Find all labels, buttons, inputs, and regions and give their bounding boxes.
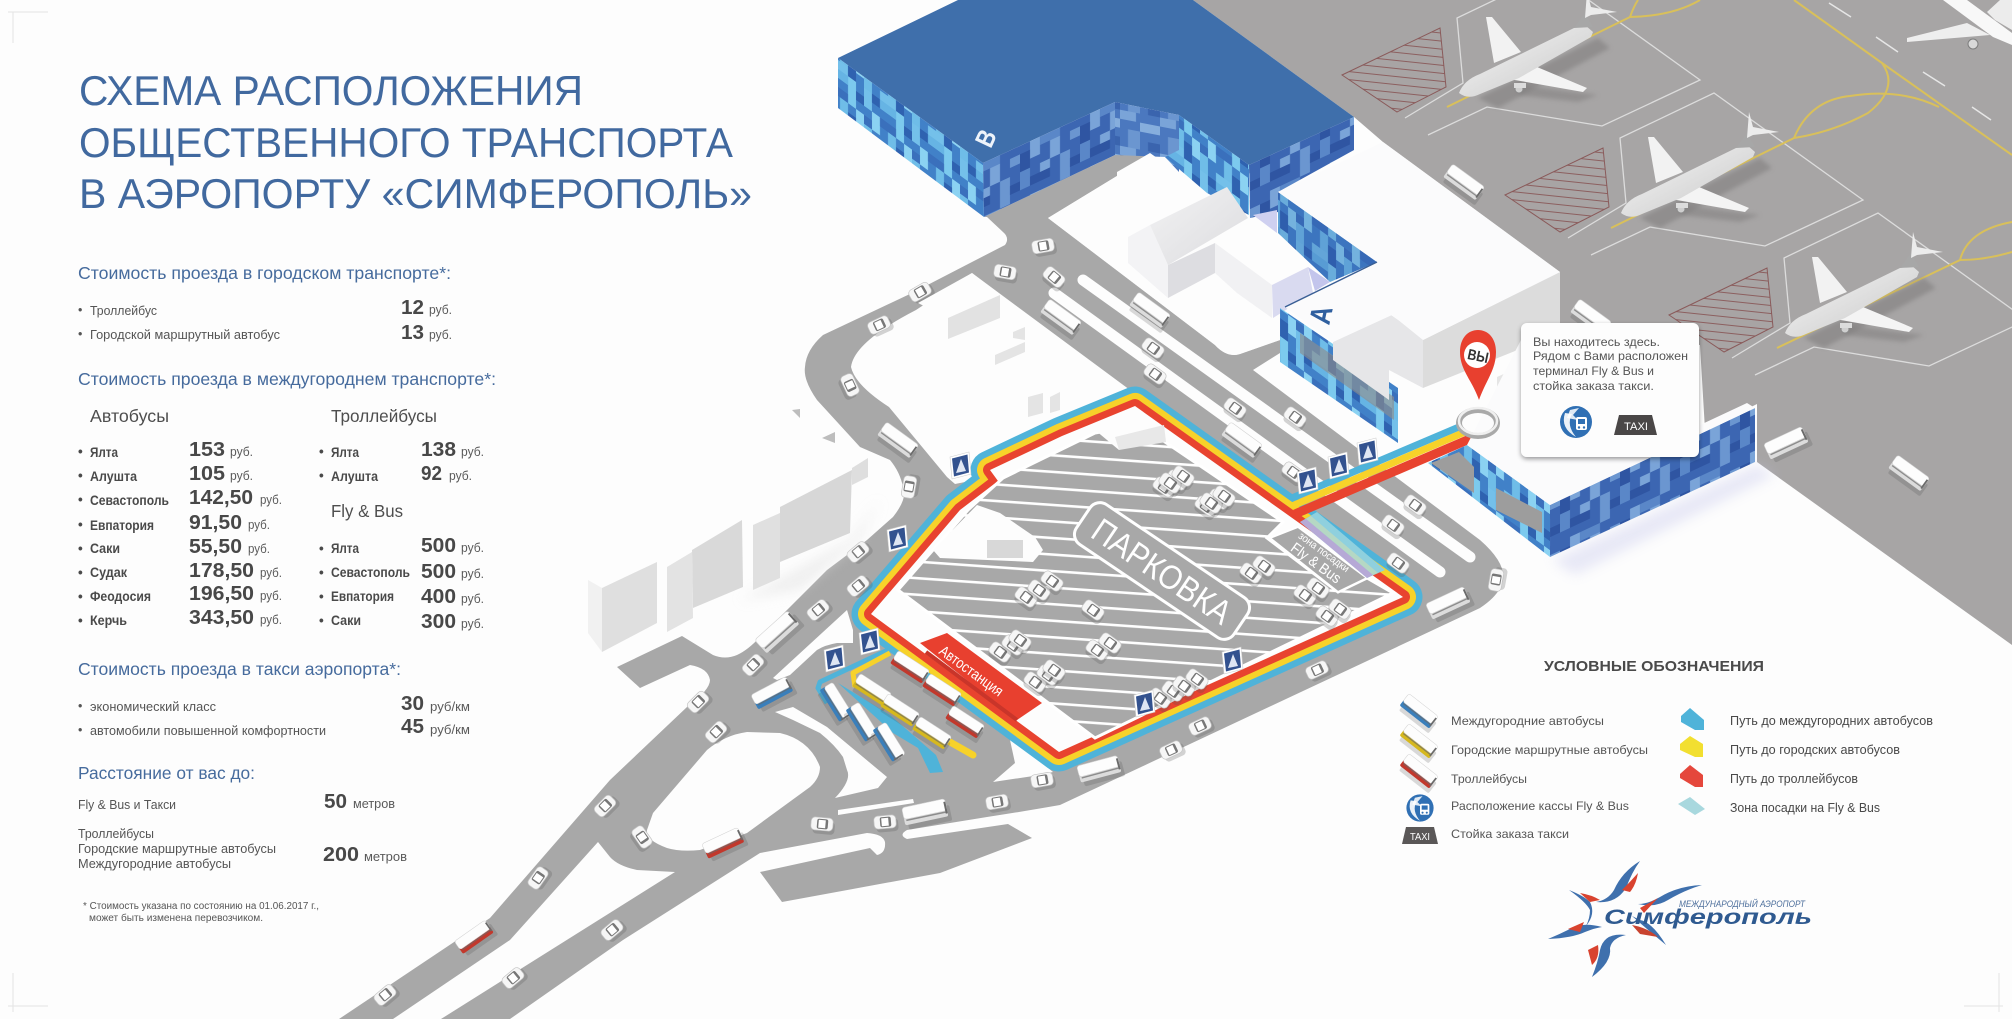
title bbox=[79, 67, 752, 217]
taxi prices: • bbox=[78, 723, 82, 737]
taxi prices: руб/км bbox=[430, 700, 470, 714]
fly and bus fares: • bbox=[319, 589, 324, 604]
intercity transport prices bbox=[78, 369, 496, 633]
logo bbox=[1548, 861, 1812, 977]
fly and bus fares: Севастополь bbox=[331, 565, 410, 580]
bus fares: Судак bbox=[90, 565, 127, 580]
distances: 200 bbox=[323, 844, 359, 866]
taxi prices: 30 bbox=[401, 693, 424, 715]
legend: УСЛОВНЫЕ ОБОЗНАЧЕНИЯ bbox=[1544, 658, 1764, 675]
title: СХЕМА РАСПОЛОЖЕНИЯ bbox=[79, 67, 583, 114]
bus fares bbox=[78, 439, 282, 629]
house in front of terminal bbox=[1117, 153, 1313, 318]
legend bbox=[1397, 658, 1933, 844]
legend: fly and bus boarding zone bbox=[1678, 797, 1880, 815]
airplanes bbox=[1459, 0, 2012, 348]
taxi prices: 45 bbox=[401, 716, 424, 738]
trolleybus fares: • bbox=[319, 468, 324, 483]
fly and bus fares: руб. bbox=[461, 541, 484, 555]
fly and bus fares: Евпатория bbox=[331, 589, 394, 604]
legend: route to city buses bbox=[1680, 736, 1900, 757]
fly and bus fares bbox=[319, 501, 484, 633]
building B bbox=[838, 0, 1354, 218]
apron with parking stands bbox=[1193, 0, 2012, 645]
distances bbox=[78, 763, 407, 871]
legend: trolleybus: Троллейбусы bbox=[1451, 772, 1527, 786]
bus fares: Алушта bbox=[90, 469, 137, 484]
boulevard medians bbox=[1054, 280, 1470, 572]
legend: intercity bus bbox=[1397, 693, 1604, 733]
trolleybus fares: 92 bbox=[421, 463, 442, 485]
legend: fly and bus boarding zone: Зона посадки на Fly & Bus bbox=[1730, 801, 1880, 815]
bus fares: руб. bbox=[260, 566, 282, 580]
bus fares: 178,50 bbox=[189, 560, 254, 582]
city transport prices: 12 bbox=[401, 297, 424, 319]
you are here pin bbox=[1460, 330, 1496, 400]
building B: В bbox=[970, 125, 1003, 152]
bus fares: • bbox=[78, 565, 83, 580]
callout: Рядом с Вами расположен bbox=[1533, 349, 1688, 363]
legend: route to intercity buses: Путь до междугородних автобусов bbox=[1730, 714, 1933, 728]
bus fares: Ялта bbox=[90, 445, 118, 460]
legend: fly and bus ticket office: Расположение кассы Fly & Bus bbox=[1451, 799, 1629, 813]
legend: route to city buses: Путь до городских автобусов bbox=[1730, 743, 1900, 757]
city transport prices: руб. bbox=[429, 328, 452, 342]
parked cars bbox=[985, 464, 1354, 714]
terminal A: А bbox=[1302, 302, 1339, 327]
trolleybus fares: руб. bbox=[461, 445, 484, 459]
bus fares: • bbox=[78, 444, 83, 459]
parking lot bbox=[898, 417, 1393, 738]
trolleybus fares bbox=[319, 439, 484, 485]
callout: Вы находитесь здесь. bbox=[1533, 335, 1660, 349]
bus fares: Феодосия bbox=[90, 589, 151, 604]
distances: 50 bbox=[324, 791, 347, 813]
intercity transport prices: Автобусы bbox=[90, 406, 169, 426]
bus fares: 105 bbox=[189, 463, 225, 485]
roof of terminal A bbox=[1278, 142, 1560, 342]
fly and bus boarding zone: Fly & Bus bbox=[1287, 540, 1344, 587]
distances: Междугородние автобусы bbox=[78, 857, 231, 871]
legend: city bus bbox=[1397, 723, 1648, 763]
bus fares: руб. bbox=[248, 518, 270, 532]
left apartment blocks bbox=[588, 409, 880, 652]
plane top right bbox=[1907, 0, 2012, 49]
bus station building: Автостанция bbox=[936, 642, 1006, 700]
bus fares: • bbox=[78, 468, 83, 483]
fly and bus fares: 400 bbox=[421, 586, 456, 608]
legend: route to intercity buses bbox=[1681, 708, 1933, 730]
bus fares: Саки bbox=[90, 541, 120, 556]
distances: Расстояние от вас до: bbox=[78, 763, 255, 783]
trolleybus fares: Ялта bbox=[331, 445, 359, 460]
logo: МЕЖДУНАРОДНЫЙ АЭРОПОРТ bbox=[1679, 898, 1806, 910]
terminal lower block bbox=[1428, 340, 1775, 575]
bus fares: 55,50 bbox=[189, 536, 242, 558]
bus fares: • bbox=[78, 517, 83, 532]
logo: Симферополь bbox=[1604, 906, 1812, 929]
trolleybus fares: Алушта bbox=[331, 469, 378, 484]
legend: route to trolleybuses: Путь до троллейбусов bbox=[1730, 772, 1858, 786]
legend: taxi desk bbox=[1402, 827, 1569, 844]
roof of terminal B bbox=[838, 0, 1354, 165]
bus fares: руб. bbox=[260, 613, 282, 627]
bus fares: 196,50 bbox=[189, 583, 254, 605]
bus fares: 153 bbox=[189, 439, 225, 461]
pedestrian route bands around parking bbox=[871, 406, 1403, 752]
footnote bbox=[83, 901, 319, 924]
bus fares: Севастополь bbox=[90, 493, 169, 508]
bus fares: Евпатория bbox=[90, 518, 154, 533]
city transport prices: 13 bbox=[401, 322, 424, 344]
fly and bus fares: • bbox=[319, 541, 324, 556]
legend: taxi desk: TAXI bbox=[1410, 832, 1430, 843]
fly and bus fares: 500 bbox=[421, 561, 456, 583]
city transport prices: Троллейбус bbox=[90, 304, 157, 318]
fly and bus fares: 500 bbox=[421, 535, 456, 557]
taxi prices: руб/км bbox=[430, 723, 470, 737]
parking label: ПАРКОВКА bbox=[1084, 511, 1239, 632]
legend: taxi desk: Стойка заказа такси bbox=[1451, 827, 1569, 841]
bus fares: • bbox=[78, 589, 83, 604]
callout: терминал Fly & Bus и bbox=[1533, 364, 1654, 378]
city transport prices: Стоимость проезда в городском транспорте*: bbox=[78, 263, 451, 283]
fly and bus fares: 300 bbox=[421, 611, 456, 633]
city transport prices: • bbox=[78, 327, 82, 341]
bus fares: руб. bbox=[248, 542, 270, 556]
road vehicles bbox=[372, 164, 1932, 1010]
you are here pin: ВЫ bbox=[1466, 346, 1490, 367]
fly and bus boarding zone: зона посадки bbox=[1296, 530, 1352, 575]
bus fares: 91,50 bbox=[189, 512, 242, 534]
footnote: может быть изменена перевозчиком. bbox=[89, 912, 263, 924]
city transport prices: руб. bbox=[429, 303, 452, 317]
legend: intercity bus: Междугородние автобусы bbox=[1451, 714, 1604, 728]
building on parking corner bbox=[933, 417, 1166, 562]
distances: метров bbox=[364, 850, 407, 864]
legend: route to trolleybuses bbox=[1680, 765, 1858, 787]
bus station building bbox=[920, 633, 1042, 720]
taxi prices: автомобили повышенной комфортности bbox=[90, 724, 326, 738]
city transport prices bbox=[78, 263, 452, 344]
fly and bus fares: Саки bbox=[331, 613, 361, 628]
white ground islands bbox=[647, 154, 1309, 851]
star emblem bbox=[1548, 861, 1702, 977]
callout bbox=[1521, 323, 1699, 457]
small buildings by left road bbox=[918, 273, 1060, 417]
fly and bus fares: руб. bbox=[461, 617, 484, 631]
trolleybus fares: 138 bbox=[421, 439, 456, 461]
trolleybus fares: • bbox=[319, 444, 324, 459]
city transport prices: • bbox=[78, 303, 82, 317]
route branch to ring bbox=[1292, 427, 1472, 514]
bus fares: руб. bbox=[260, 589, 282, 603]
icon: fly and bus bbox=[1560, 406, 1592, 438]
taxi prices: экономический класс bbox=[90, 700, 216, 714]
taxi prices bbox=[78, 659, 470, 738]
legend: fly and bus ticket office bbox=[1406, 794, 1629, 822]
terminal A bbox=[1278, 142, 1560, 443]
icon: taxi bbox=[1614, 415, 1657, 435]
legend: trolleybus bbox=[1397, 753, 1527, 793]
buses at station bbox=[816, 650, 987, 766]
road network bbox=[339, 154, 1503, 1019]
distances: метров bbox=[353, 797, 395, 811]
bus fares: 343,50 bbox=[189, 607, 254, 629]
city transport prices: Городской маршрутный автобус bbox=[90, 328, 280, 342]
bus fares: • bbox=[78, 492, 83, 507]
title: ОБЩЕСТВЕННОГО ТРАНСПОРТА bbox=[79, 119, 733, 166]
bus fares: • bbox=[78, 541, 83, 556]
icon: taxi: TAXI bbox=[1624, 421, 1648, 433]
title: В АЭРОПОРТУ «СИМФЕРОПОЛЬ» bbox=[79, 170, 752, 217]
fly and bus fares: руб. bbox=[461, 567, 484, 581]
taxi prices: Стоимость проезда в такси аэропорта*: bbox=[78, 659, 401, 679]
legend: city bus: Городские маршрутные автобусы bbox=[1451, 743, 1648, 757]
distances: Городские маршрутные автобусы bbox=[78, 842, 276, 856]
fly and bus fares: • bbox=[319, 565, 324, 580]
bus station routes bbox=[818, 650, 973, 773]
bus fares: руб. bbox=[230, 469, 253, 483]
fly and bus fares: • bbox=[319, 613, 324, 628]
fly and bus fares: Fly & Bus bbox=[331, 501, 403, 521]
taxi prices: • bbox=[78, 699, 82, 713]
distances: Троллейбусы bbox=[78, 827, 154, 841]
bus fares: руб. bbox=[260, 493, 282, 507]
crosswalk signs bbox=[824, 438, 1378, 717]
bus fares: • bbox=[78, 613, 83, 628]
bus fares: Керчь bbox=[90, 613, 127, 628]
fly and bus fares: Ялта bbox=[331, 541, 359, 556]
intercity transport prices: Стоимость проезда в междугороднем транспорте*: bbox=[78, 369, 496, 389]
bus fares: руб. bbox=[230, 445, 253, 459]
distances: Fly & Bus и Такси bbox=[78, 798, 176, 812]
fly and bus fares: руб. bbox=[461, 592, 484, 606]
trolleybus fares: руб. bbox=[449, 469, 472, 483]
fly and bus boarding zone bbox=[1270, 512, 1385, 592]
intercity transport prices: Троллейбусы bbox=[331, 406, 437, 426]
footnote: * Стоимость указана по состоянию на 01.06.2017 г., bbox=[83, 901, 319, 912]
bus fares: 142,50 bbox=[189, 487, 253, 509]
you are here ring bbox=[1459, 408, 1497, 436]
callout: стойка заказа такси. bbox=[1533, 379, 1654, 393]
